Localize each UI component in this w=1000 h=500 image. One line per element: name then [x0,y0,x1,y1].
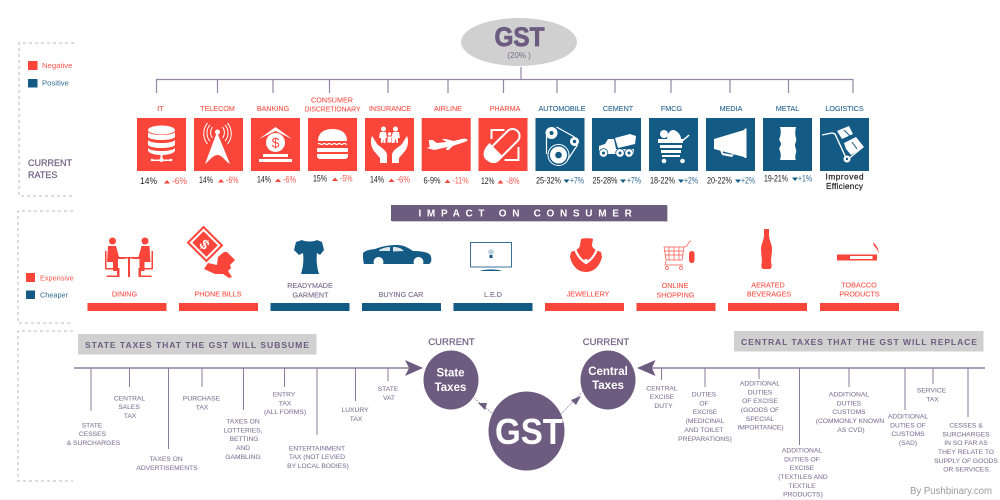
icon: hand holding bill: $ [196,236,213,253]
state tax labels: (ALL FORMS) [264,409,306,416]
GST rate ellipse: GST [494,22,545,52]
central tax labels: TAX [926,396,939,404]
central tax labels: SURCHARGES [942,432,990,438]
item: buying car: BUYING CAR [379,290,423,299]
central tax labels: (GOODS OF [741,407,779,414]
sector: FMCG [649,104,698,186]
sector: consumer discretionary: CONSUMER [311,96,353,104]
state tax labels: TAX [124,413,137,420]
heading: central taxes [734,331,984,352]
current state taxes circle: Taxes [435,382,466,394]
central tax labels: DUTIES [692,392,717,398]
central tax labels: CENTRAL [646,386,678,392]
central tax labels [646,380,998,498]
central tax labels: ADDITIONAL [888,414,928,420]
central tax labels: DUTIES [748,390,773,396]
central tax labels: ADDITIONAL [740,380,780,388]
icon: metal bar [779,127,796,160]
central tax labels: (TEXTILES AND [778,474,828,481]
sector: insurance [365,104,414,184]
item: online shopping: ONLINE [662,281,689,290]
icon: database [148,126,175,162]
sector: airline [422,104,471,186]
state tax labels: VAT [383,395,395,402]
sector: banking: -6% [283,174,296,184]
sector: FMCG: FMCG [661,104,682,113]
sector: metal: METAL [776,104,799,113]
sector: airline: 6-9% [424,176,440,186]
sector: logistics: LOGISTICS [825,104,864,113]
item: aerated beverages: AERATED [751,280,785,290]
current central taxes circle: Central [588,366,628,378]
item: aerated beverages [728,229,807,311]
sector: consumer discretionary: 15% [313,174,327,184]
item: tobacco products: PRODUCTS [839,290,880,298]
sector connector tree [156,67,853,93]
sector: cement [592,104,641,186]
state tax labels: STATE [82,422,103,430]
icon: airplane [427,139,468,150]
GST rate ellipse [461,18,577,66]
sector: consumer discretionary: -5% [340,174,352,184]
state tax labels: LOTTERIES, [223,428,263,434]
sector: telecom: -6% [226,175,238,185]
central tax labels: EXCISE [790,465,815,472]
central tax labels: EXCISE [650,394,675,401]
item: online shopping [636,241,716,311]
sector: airline: AIRLINE [434,104,462,113]
current state taxes circle: State [436,368,465,380]
current central taxes circle: Taxes [592,380,624,392]
sector: FMCG: 18-22% [650,176,675,186]
sector: automobile: +7% [570,176,584,186]
sector: insurance: INSURANCE [369,104,411,113]
legend: negative and positive: Negative [42,61,72,70]
central tax labels: DUTIES OF [890,422,926,430]
legend: negative and positive [28,61,72,88]
sector: IT [137,104,187,186]
arrow: central taxes to GST [561,391,583,414]
state tax labels: BY LOCAL BODIES) [287,463,349,470]
sector: telecom: TELECOM [200,104,235,113]
icon: sedan car [363,245,431,267]
icon: pill capsule [484,126,522,165]
icon: LED monitor with bulb [470,242,512,271]
heading: current rates: RATES [28,170,57,180]
central tax timeline arrow [637,360,985,445]
state tax labels: PURCHASE [183,396,221,402]
state tax labels: TAX [196,404,209,412]
sector: consumer discretionary: DISCRETIONARY [304,104,361,114]
central tax labels: SERVICE [917,388,947,394]
central tax labels: DUTY [654,403,673,410]
central tax labels: EXCISE [693,409,718,416]
sector: metal: 19-21% [764,174,788,184]
icon: cart and mouse [664,241,694,270]
current state taxes circle [424,337,478,410]
sector: banking [251,104,300,184]
item: phone bills [179,227,258,311]
item: jewellery: JEWELLERY [567,290,610,298]
sector: logistics: Improved [826,172,864,182]
sector: insurance: 14% [370,174,384,184]
icon: hand truck with boxes [822,126,864,162]
legend: expensive and cheaper: Expensive [40,274,74,282]
state tax labels: SALES [118,404,140,411]
icon: engine belt pulleys [546,127,579,166]
central tax labels: PREPARATIONS) [678,436,732,443]
item: tobacco products: TOBACCO [841,280,877,290]
central tax labels: OF [699,400,709,408]
central tax labels: (SAD) [899,440,917,447]
sector: banking: BANKING [257,104,290,113]
central tax labels: IN SO FAR AS [944,440,988,447]
sector: IT: -6% [172,176,187,186]
heading: central taxes: CENTRAL TAXES THAT THE GST WILL REPLACE [741,337,977,347]
GST circle: GST [495,411,563,452]
heading: current rates [28,158,73,180]
sector: pharma: PHARMA [490,104,521,113]
state tax labels: BETTING [230,436,258,443]
sector: media: MEDIA [720,104,743,113]
icon: megaphone [714,128,746,158]
item: dining: DINING [112,290,137,298]
legend: expensive and cheaper: Cheaper [40,290,69,300]
state tax labels: TAXES ON [149,456,183,463]
heading: state taxes: STATE TAXES THAT THE GST WILL SUBSUME [85,340,309,350]
legend: negative and positive: Positive [42,78,69,88]
item: dining [88,238,166,311]
central tax labels: AS CVD) [837,427,865,434]
central tax labels: ADDITIONAL [829,392,869,398]
sector: IT: IT [157,104,164,113]
state tax labels: AND [236,445,250,452]
central tax labels: ADDITIONAL [782,448,822,454]
icon: cola bottle [761,229,772,269]
sector: cement: +7% [627,176,641,186]
icon: antenna tower [204,123,231,164]
sector: logistics [820,104,869,191]
central tax labels: THEY RELATE TO [938,449,994,456]
central tax labels: OR SERVICES. [943,466,991,474]
central tax labels: SPECIAL [746,416,774,423]
icon: shopping trolley [658,130,689,163]
central tax labels: DUTIES OF [784,456,820,464]
sector: cement: 25-28% [592,176,618,186]
item: LED [454,242,532,311]
state tax labels: TAX (NOT LEVIED [289,454,345,461]
sector: telecom: 14% [199,175,213,185]
central tax labels: TEXTILE [788,483,816,490]
current central taxes circle [580,337,636,410]
icon: t-shirt [294,240,324,274]
central tax labels: OF EXCISE [742,398,778,405]
state tax labels: CESSES [79,431,107,438]
item: readymade garment [270,240,350,311]
icon: burger [317,129,348,159]
central tax labels: AND TOILET [684,427,724,434]
sector: media [706,104,755,186]
item: buying car [362,245,441,311]
item: readymade garment: GARMENT [293,290,329,300]
state tax labels: TAX [279,400,292,408]
item: online shopping: SHOPPING [657,290,695,300]
sector: telecom [194,104,243,185]
state tax labels: CENTRAL [114,396,145,402]
heading: impact on consumer [391,205,668,222]
central tax labels: PRODUCTS) [783,492,823,498]
sector: FMCG: +2% [684,176,698,186]
sector: pharma [478,104,528,186]
sector: automobile: AUTOMOBILE [538,104,586,113]
sector: pharma: 12% [481,176,494,186]
icon: cigarette with smoke [837,242,879,260]
GST rate ellipse: (20% ) [507,51,531,60]
heading: state taxes [78,334,316,354]
legend: expensive and cheaper [26,273,74,300]
current state taxes circle: CURRENT [428,337,475,348]
central tax labels: CESSES & [949,422,983,430]
state tax labels: LUXURY [341,407,369,414]
central tax labels: DUTIES [837,400,862,408]
icon: hands holding family [371,126,408,163]
state tax labels: STATE [378,386,399,393]
sector: insurance: -6% [396,174,410,184]
central tax labels: IMPORTANCE) [737,424,784,432]
icon: cement mixer truck [599,134,636,157]
central tax labels: SUPPLY OF GOODS [934,458,998,465]
state tax labels: TAX [350,416,363,423]
sector: media: +2% [741,176,755,186]
GST circle [488,392,564,470]
sector: airline: -11% [452,176,468,186]
state tax labels: TAXES ON [226,418,260,426]
item: readymade garment: READYMADE [287,281,333,290]
state tax timeline arrow [74,360,423,449]
state tax labels [67,386,399,472]
sector: IT: 14% [140,176,157,186]
icon: bank with dollar: $ [272,134,280,150]
credit: By Pushbinary.com [910,486,992,497]
central tax labels: (COMMONLY KNOWN [816,418,884,425]
state tax labels: GAMBLING [225,454,261,461]
item: aerated beverages: BEVERAGES [747,290,791,298]
item: phone bills: PHONE BILLS [194,290,242,298]
item: LED: L.E.D [484,290,502,299]
sector: banking: 14% [257,174,271,184]
item: jewellery [545,238,624,311]
icon: two people at a table [105,238,153,277]
state tax labels: ADVERTISEMENTS [136,465,198,472]
sector: automobile: 25-32% [536,176,561,186]
heading: current rates: CURRENT [28,158,73,168]
sector: pharma: -8% [506,176,520,186]
state tax labels: ENTRY [273,392,296,398]
heading: impact on consumer: IMPACT ON CONSUMER [418,208,638,220]
sector: metal: +1% [798,174,812,184]
item: tobacco products [820,242,899,311]
sector: metal [763,104,812,184]
central tax labels: (MEDICINAL [686,418,725,425]
sector: cement: CEMENT [603,104,634,113]
current central taxes circle: CURRENT [583,337,629,348]
sector: logistics: Efficiency [826,182,864,191]
sector: media: 20-22% [707,176,732,186]
central tax labels: CUSTOMS [832,409,866,416]
icon: necklace on bust [570,238,602,272]
sector: consumer discretionary [304,96,361,184]
central tax labels: CUSTOMS [891,431,925,438]
state tax labels: ENTERTAINMENT [289,446,345,452]
sector: automobile [536,104,586,186]
state tax labels: & SURCHARGES [67,440,121,447]
arrow: state taxes to GST [474,398,494,415]
